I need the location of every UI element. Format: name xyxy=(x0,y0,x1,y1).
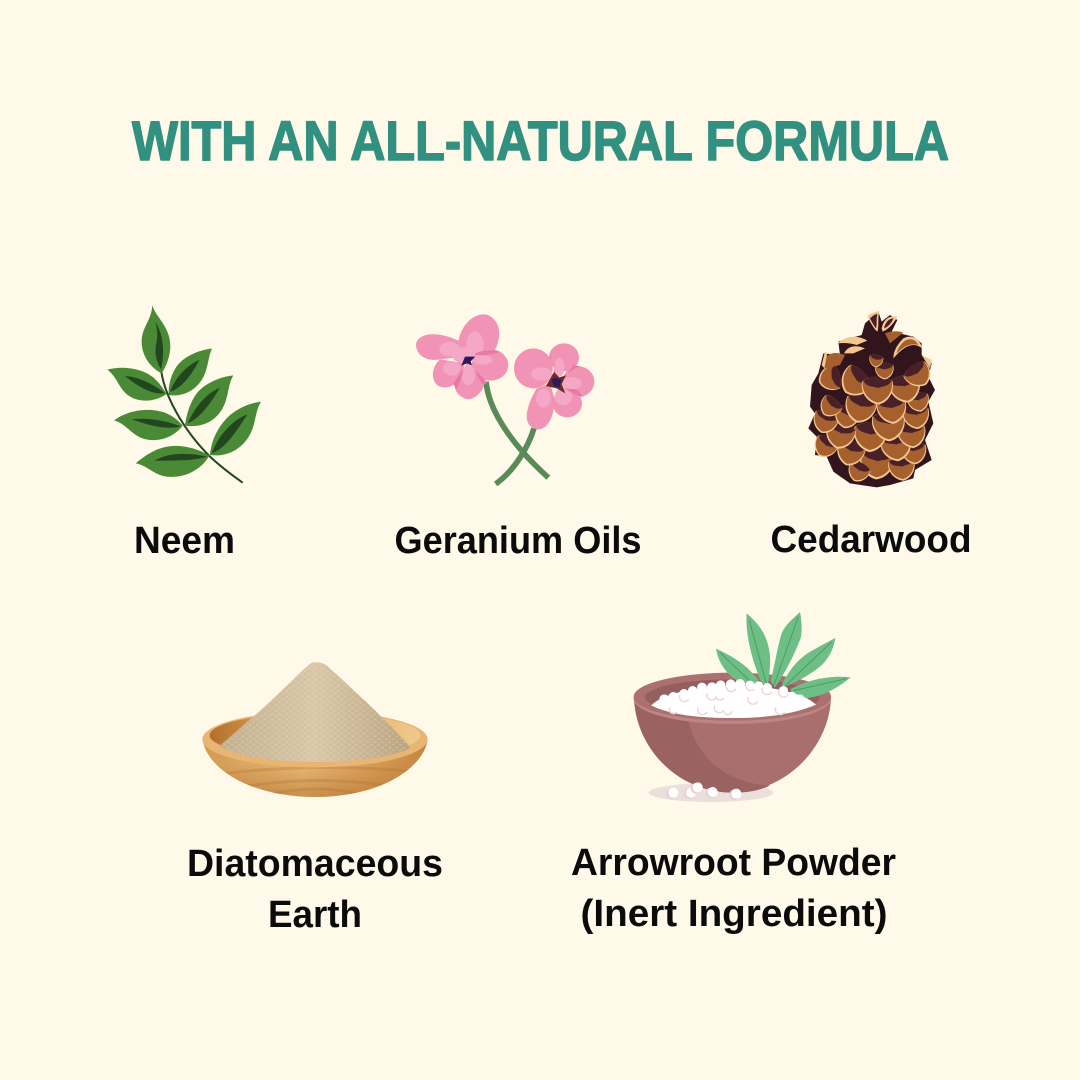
icon: arrowroot powder bowl xyxy=(634,612,851,802)
label: Diatomaceous Earth: Earth xyxy=(268,894,362,936)
label: Geranium Oils: Geranium Oils xyxy=(394,520,642,562)
spilled pearls xyxy=(666,782,741,800)
label: Diatomaceous Earth xyxy=(187,843,443,936)
label: Arrowroot Powder (Inert Ingredient): (Inert Ingredient) xyxy=(580,893,888,935)
label: Diatomaceous Earth: Diatomaceous xyxy=(187,843,443,885)
icon: neem leaves xyxy=(107,305,261,483)
leaves xyxy=(716,612,851,698)
label: Neem: Neem xyxy=(134,520,235,562)
label: Arrowroot Powder (Inert Ingredient) xyxy=(571,842,896,935)
powder heap xyxy=(651,679,816,718)
label: Arrowroot Powder (Inert Ingredient): Arrowroot Powder xyxy=(571,842,896,884)
icon: pine cone xyxy=(808,311,936,487)
title: WITH AN ALL-NATURAL FORMULA xyxy=(132,109,949,172)
icon: geranium flowers xyxy=(416,314,594,484)
label: Cedarwood: Cedarwood xyxy=(770,519,972,561)
icon: diatomaceous earth in wooden bowl xyxy=(202,662,428,797)
